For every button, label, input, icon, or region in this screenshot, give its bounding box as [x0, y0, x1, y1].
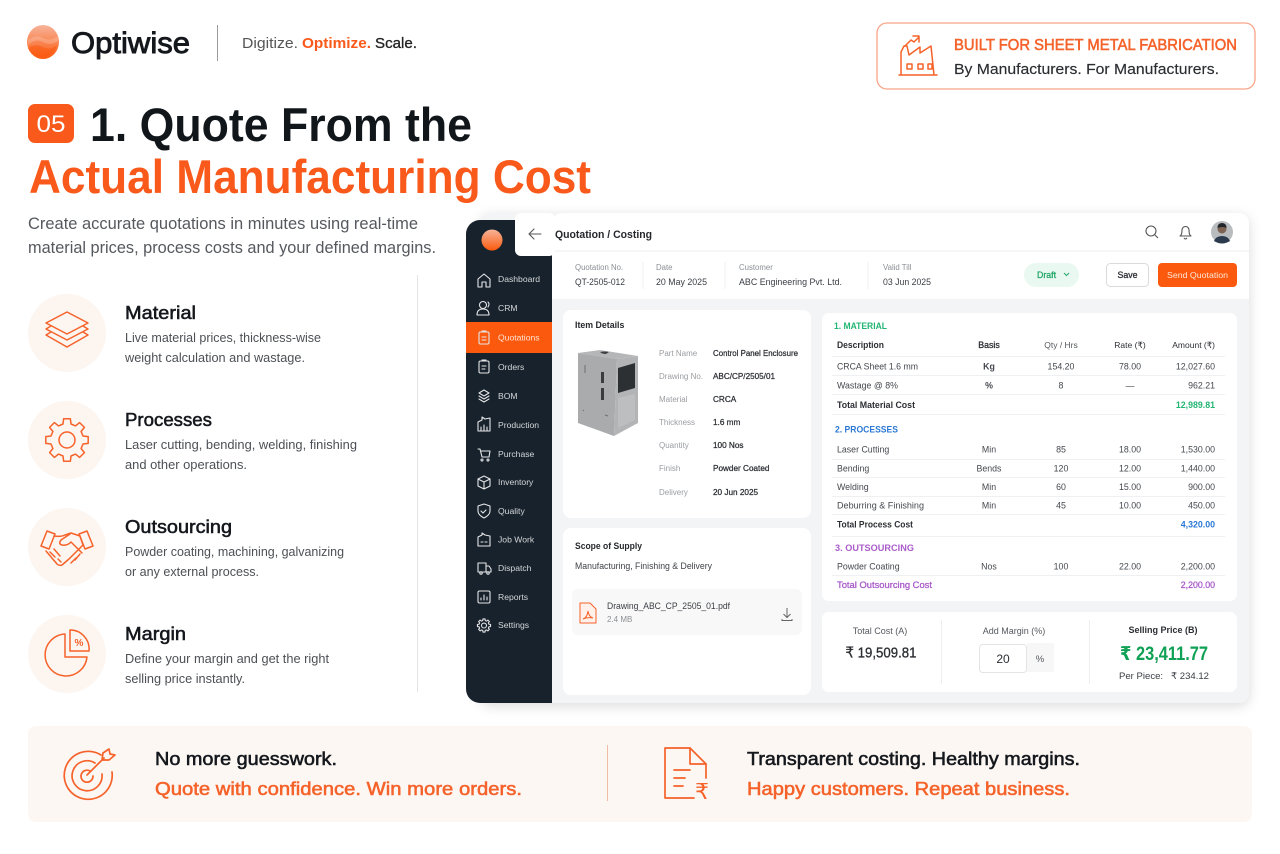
section: processes: Bends: [977, 464, 1002, 474]
panel: item details: Control Panel Enclosure: [713, 349, 798, 358]
nav: Reports: Reports: [498, 592, 528, 602]
section: outsourcing: 22.00: [1119, 562, 1141, 572]
quotation meta: ABC Engineering Pvt. Ltd.: [739, 277, 842, 287]
nav: Quotations (active): [479, 331, 540, 344]
section: material: —: [1126, 380, 1135, 390]
selling price: [1119, 625, 1209, 682]
badge: 05: [28, 104, 74, 143]
tagline: Scale.: [375, 35, 417, 52]
quotation meta: QT-2505-012: [575, 277, 625, 287]
nav: CRM: CRM: [498, 303, 518, 313]
section: processes: 1,440.00: [1181, 464, 1215, 474]
panel: price summary: [822, 612, 1237, 692]
section: processes: Laser Cutting: [837, 444, 889, 454]
tagline: Optimize.: [302, 35, 371, 52]
section: outsourcing: Nos: [981, 562, 997, 572]
section: processes: 15.00: [1119, 482, 1141, 492]
message: transparency: Happy customers. Repeat business.: [747, 779, 1070, 799]
callout: built for sheet metal fabrication: By Manufacturers. For Manufacturers.: [954, 61, 1219, 78]
icon: pie chart with percent: %: [75, 638, 84, 649]
section: material: 12,027.60: [1176, 362, 1215, 372]
nav: Production: [478, 417, 539, 431]
section: processes: 2. PROCESSES: [835, 424, 898, 434]
file attachment: Drawing_ABC_CP_2505_01.pdf: [607, 601, 730, 611]
nav: Quality: Quality: [498, 506, 525, 516]
nav: Inventory: Inventory: [498, 477, 534, 487]
total cost: ₹ 19,509.81: [846, 644, 916, 662]
feature: Margin: selling price instantly.: [125, 671, 245, 686]
feature: Material: [28, 294, 321, 372]
section: material: %: [985, 380, 993, 390]
section: material: Rate (₹): [1114, 340, 1146, 350]
section: processes: 10.00: [1119, 500, 1141, 510]
nav: Reports: [478, 591, 528, 603]
logo: Optiwise: Optiwise: [71, 27, 190, 60]
section: outsourcing: Total Outsourcing Cost: [837, 580, 933, 590]
margin input: 20: [996, 652, 1010, 666]
section: processes: 1,530.00: [1181, 444, 1215, 454]
section: material: 8: [1059, 380, 1064, 390]
section: processes: 45: [1056, 500, 1066, 510]
nav: Dashboard: [478, 274, 540, 287]
nav: Purchase: [478, 449, 535, 461]
feature: Margin: [28, 615, 329, 693]
nav: BOM: [479, 390, 518, 402]
feature: Processes: [28, 401, 357, 479]
nav: Job Work: Job Work: [498, 534, 535, 544]
message: transparency: [747, 749, 1080, 799]
nav: Dispatch: [478, 563, 532, 574]
panel: item details: Delivery: [659, 488, 688, 497]
button: Send Quotation: Send Quotation: [1167, 270, 1228, 280]
section: processes: 450.00: [1188, 500, 1215, 510]
panel: item details: Thickness: [659, 418, 695, 427]
selling price: Per Piece: ₹ 234.12: [1119, 671, 1209, 682]
panel: item details: 20 Jun 2025: [713, 488, 759, 497]
tagline: [218, 25, 417, 61]
feature: Processes: Laser cutting, bending, welding, finishing: [125, 437, 357, 452]
section: material: CRCA Sheet 1.6 mm: [837, 362, 918, 372]
panel: item details: [563, 310, 811, 518]
icon: target: [64, 749, 115, 799]
feature: Processes: and other operations.: [125, 457, 247, 472]
margin input: Add Margin (%): [983, 626, 1045, 636]
feature: Outsourcing: or any external process.: [125, 564, 259, 579]
icon: document with rupee: ₹: [695, 779, 709, 804]
section: processes: 60: [1056, 482, 1066, 492]
nav: Orders: Orders: [498, 362, 524, 372]
section: material: Description: [837, 340, 884, 350]
status: Draft: Draft: [1037, 270, 1057, 280]
panel: item details: Item Details: [575, 320, 624, 330]
app window: quotation / costing: [466, 213, 1249, 703]
feature: Margin: Define your margin and get the right: [125, 651, 329, 666]
panel: item details: ABC/CP/2505/01: [713, 372, 775, 381]
feature: Outsourcing: Outsourcing: [125, 516, 232, 537]
section: processes: 900.00: [1188, 482, 1215, 492]
section: material: Amount (₹): [1172, 340, 1215, 350]
nav: Dispatch: Dispatch: [498, 563, 532, 573]
feature: Material: Material: [125, 302, 196, 323]
section: processes: Min: [982, 500, 996, 510]
bottom banner: [28, 726, 1252, 822]
nav: Purchase: Purchase: [498, 449, 535, 459]
section: material: 962.21: [1188, 380, 1215, 390]
feature: Outsourcing: [28, 508, 344, 586]
title: Actual Manufacturing Cost: [29, 150, 591, 203]
icon: layers: [46, 312, 88, 347]
section: material: 154.20: [1048, 362, 1075, 372]
panel: item details: CRCA: [713, 395, 737, 404]
tagline: Digitize.: [242, 35, 298, 52]
nav: Production: Production: [498, 420, 539, 430]
message: confidence: No more guesswork.: [155, 749, 337, 769]
feature: Material: weight calculation and wastage.: [124, 350, 305, 365]
selling price: ₹ 23,411.77: [1120, 644, 1208, 665]
quotation meta: Date: [656, 263, 672, 272]
margin input: %: [1036, 654, 1045, 665]
feature: Margin: Margin: [125, 623, 186, 644]
feature: Material: Live material prices, thickness-wise: [125, 330, 321, 345]
header icons: [1146, 221, 1233, 244]
section: processes: Total Process Cost: [837, 520, 913, 530]
panel: item details: 100 Nos: [713, 441, 744, 450]
status: Draft: [1024, 263, 1079, 287]
section: outsourcing: 2,200.00: [1181, 562, 1215, 572]
intro text: material prices, process costs and your defined margins.: [28, 239, 436, 257]
nav: CRM: [477, 302, 518, 315]
panel: item details: Quantity: [659, 441, 689, 450]
logo: Optiwise: [27, 25, 190, 60]
section: material: Basis: [978, 340, 1000, 350]
panel: item details: Part Name: [659, 349, 698, 358]
section: material: Total Material Cost: [837, 400, 915, 410]
section: outsourcing: 100: [1054, 562, 1068, 572]
icon: handshake: [41, 531, 93, 565]
section: processes: 12.00: [1119, 464, 1141, 474]
section: processes: Min: [982, 444, 996, 454]
margin input: [980, 626, 1054, 672]
feature: Processes: Processes: [125, 409, 212, 430]
total cost: [846, 626, 916, 662]
panel: scope of supply: Manufacturing, Finishing & Delivery: [575, 561, 713, 571]
sidebar: [466, 220, 552, 703]
section: material: [832, 321, 1225, 414]
section: processes: [832, 424, 1225, 536]
page title: Quotation / Costing: [555, 229, 652, 241]
callout: built for sheet metal fabrication: BUILT FOR SHEET METAL FABRICATION: [954, 37, 1237, 54]
section: material: Qty / Hrs: [1044, 340, 1078, 350]
panel: costing table: [822, 313, 1237, 601]
nav: Settings: [477, 619, 529, 632]
quotation meta: 03 Jun 2025: [883, 277, 931, 287]
section: outsourcing: 3. OUTSOURCING: [835, 543, 914, 553]
section: outsourcing: 2,200.00: [1181, 580, 1215, 590]
nav: Job Work: [478, 533, 535, 546]
enclosure image: [578, 350, 638, 436]
nav: Orders: [479, 360, 524, 373]
button: Send Quotation: [1158, 263, 1237, 287]
message: transparency: Transparent costing. Healthy margins.: [747, 749, 1080, 769]
section: processes: Deburring & Finishing: [837, 500, 924, 510]
nav: Dashboard: Dashboard: [498, 274, 540, 284]
badge: 05: 05: [36, 111, 66, 138]
back button: [515, 213, 555, 256]
section: outsourcing: Powder Coating: [837, 562, 900, 572]
button: Save: Save: [1117, 270, 1138, 280]
section: processes: Bending: [837, 464, 869, 474]
message: confidence: [155, 749, 522, 799]
callout: built for sheet metal fabrication: [877, 23, 1255, 89]
section: processes: Welding: [837, 482, 869, 492]
nav: Quotations (active): Quotations: [498, 332, 540, 342]
total cost: Total Cost (A): [853, 626, 907, 636]
message: confidence: Quote with confidence. Win more orders.: [155, 779, 522, 799]
section: processes: 4,320.00: [1181, 520, 1215, 530]
icon: pie chart with percent: [45, 630, 89, 676]
quotation meta: 20 May 2025: [656, 277, 707, 287]
panel: scope of supply: [563, 528, 811, 695]
nav: BOM: BOM: [498, 391, 518, 401]
panel: item details: Powder Coated: [713, 464, 770, 473]
panel: scope of supply: Scope of Supply: [575, 541, 642, 551]
quotation meta: Quotation No.: [575, 263, 623, 272]
panel: item details: Finish: [659, 464, 680, 473]
section: processes: 18.00: [1119, 444, 1141, 454]
panel: item details: Material: [659, 395, 688, 404]
selling price: Selling Price (B): [1128, 625, 1198, 635]
nav: Settings: Settings: [498, 620, 529, 630]
section: outsourcing: [832, 543, 1225, 590]
title: 1. Quote From the: [90, 98, 472, 151]
section: material: Kg: [983, 362, 995, 372]
title: [29, 98, 591, 203]
feature: Outsourcing: Powder coating, machining, galvanizing: [125, 544, 344, 559]
icon: document with rupee: [665, 748, 709, 804]
section: processes: 85: [1056, 444, 1066, 454]
intro text: Create accurate quotations in minutes using real-time: [28, 215, 418, 233]
section: processes: Min: [982, 482, 996, 492]
panel: item details: 1.6 mm: [713, 418, 740, 427]
nav: Quality: [478, 504, 525, 518]
button: Save: [1106, 264, 1148, 286]
panel: item details: Drawing No.: [659, 372, 703, 381]
section: material: Wastage @ 8%: [837, 380, 898, 390]
icon: factory with arrow: [899, 36, 937, 75]
quotation meta: Customer: [739, 263, 773, 272]
file attachment: [572, 589, 802, 635]
intro text: [28, 215, 436, 257]
nav: Inventory: [478, 476, 534, 489]
section: processes: 120: [1054, 464, 1068, 474]
section: material: 1. MATERIAL: [834, 321, 887, 331]
file attachment: 2.4 MB: [607, 615, 632, 624]
section: material: 12,989.81: [1176, 400, 1215, 410]
quotation meta: Valid Till: [883, 263, 912, 272]
quotation meta: [575, 262, 931, 289]
icon: gear: [46, 419, 88, 461]
section: material: 78.00: [1119, 362, 1141, 372]
